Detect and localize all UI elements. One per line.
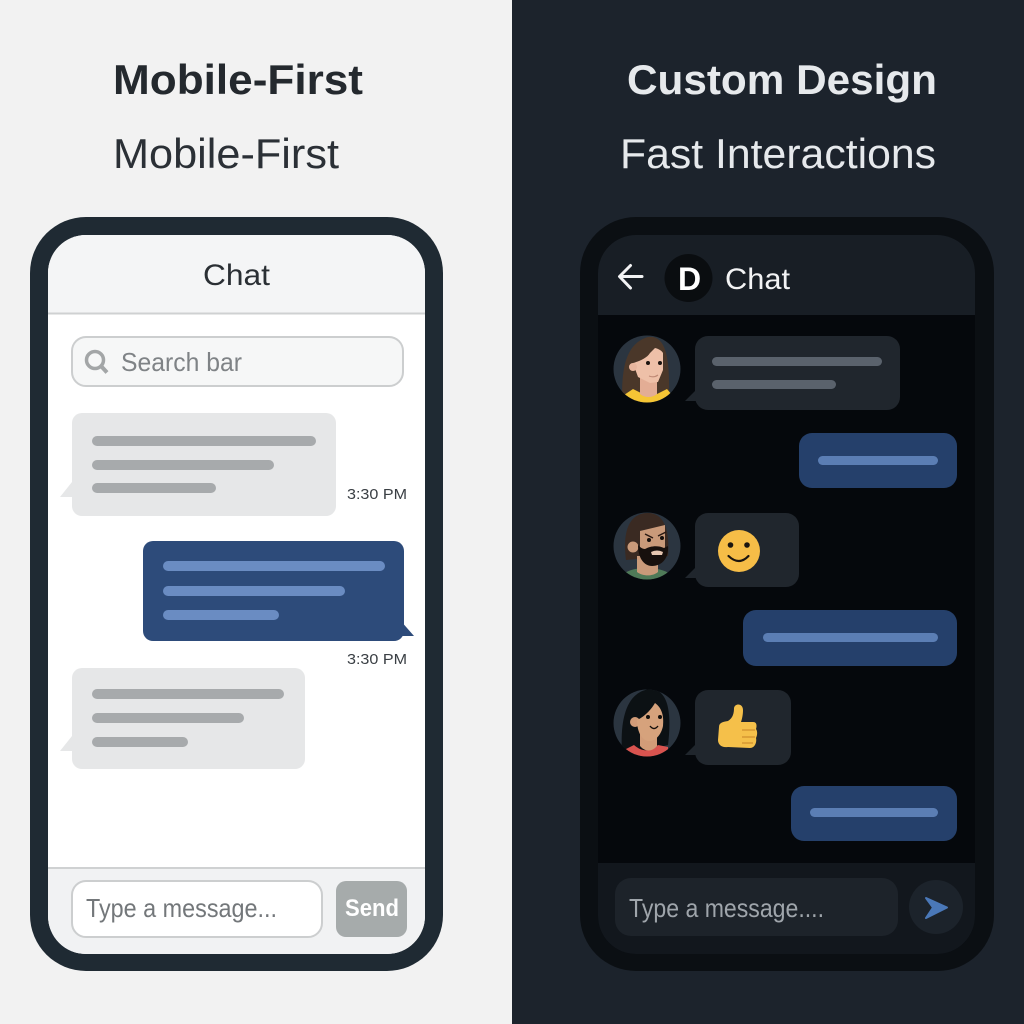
phone screen [48,235,425,954]
received bubble 1 [685,336,900,410]
search bar [72,337,403,386]
heading: Custom Design: Custom Design [627,56,937,103]
heading: Fast Interactions: Fast Interactions [620,130,936,177]
input placeholder: Type a message... [86,893,277,923]
message input [72,881,322,937]
avatar: woman in yellow [614,336,680,406]
profile badge [664,254,712,302]
header title: Chat [203,259,271,292]
icon: thumbs up [718,704,757,748]
received emoji bubble [685,513,799,587]
input placeholder: Type a message.... [629,893,824,923]
chat header [48,235,425,314]
send button [336,881,407,937]
search placeholder: Search bar [121,347,242,377]
phone frame [580,217,994,971]
icon: back arrow [620,266,642,288]
avatar: woman in red [614,689,680,762]
sent bubble [143,541,414,641]
received bubble 2 [60,668,305,769]
icon: send arrow [926,898,947,918]
sent bubble 2 [743,610,957,666]
phone frame [30,217,443,971]
message input [615,878,898,936]
profile badge: D [678,261,701,297]
icon: magnifier [86,352,107,372]
input footer [48,867,425,954]
timestamp 1: 3:30 PM [347,486,407,503]
heading: Mobile-First bold: Mobile-First [113,56,363,103]
timestamp 2: 3:30 PM [347,651,407,668]
panel: light background [0,0,512,1024]
input footer [598,863,975,954]
avatar: bearded man [614,512,680,584]
received bubble 1 [60,413,336,516]
header title: Chat [725,263,791,296]
send button [909,880,963,934]
received emoji bubble [685,690,791,765]
panel: dark phone [580,217,994,971]
icon: smiley [718,530,760,572]
phone screen [598,235,975,954]
sent bubble 3 [791,786,957,841]
send label: Send [345,895,399,922]
panel: dark background [512,0,1024,1024]
heading: Mobile-First regular: Mobile-First [113,130,339,177]
sent bubble 1 [799,433,957,488]
panel: light phone [30,217,443,971]
chat header [598,235,975,315]
